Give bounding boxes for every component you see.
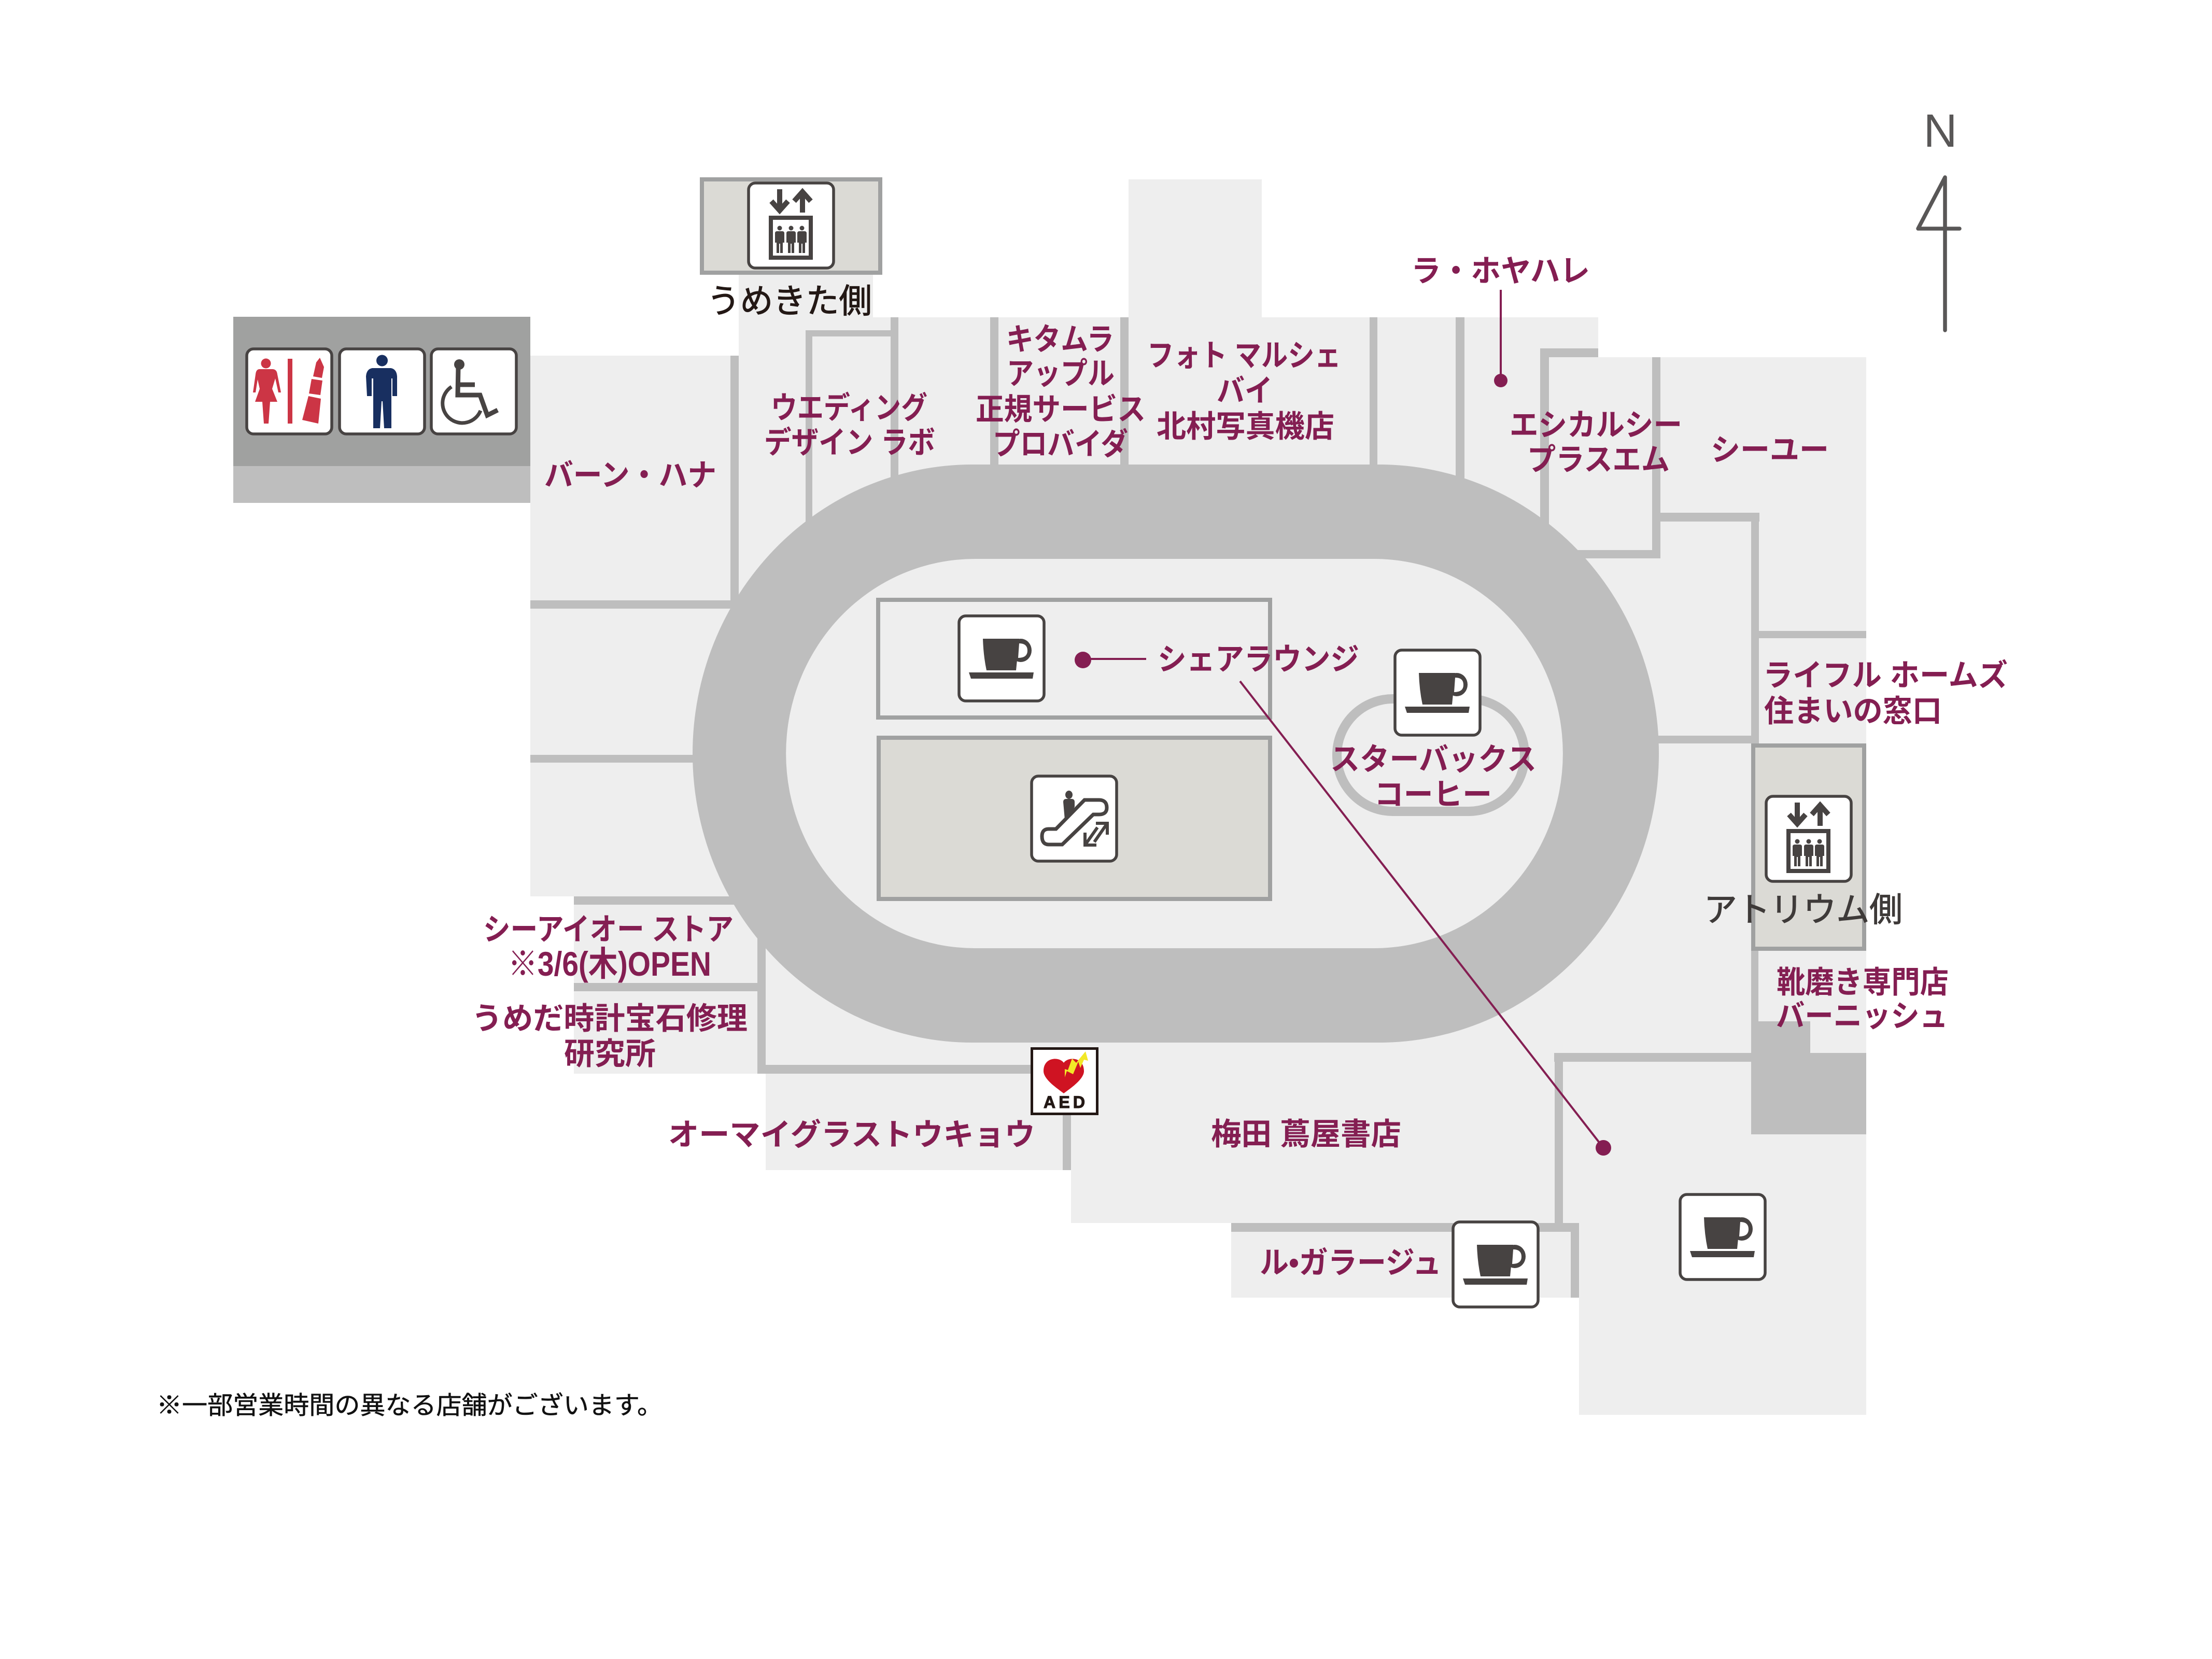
label: kitamura apple service provider: 正規サービス <box>976 392 1146 427</box>
label: kitamura apple service provider: プロバイダ <box>993 427 1128 461</box>
label: photo marche by kitamura: 北村写真機店 <box>1157 410 1334 444</box>
floor plan background <box>530 179 1866 1415</box>
label: c.i.o store: シーアイオー ストア <box>483 912 734 947</box>
icon: men's restroom <box>340 349 425 434</box>
label: kitamura apple service provider: キタムラ <box>1006 322 1114 357</box>
shop partition walls <box>530 317 1866 1298</box>
label: wedding design lab <box>764 391 935 460</box>
icon: women's restroom <box>247 349 332 434</box>
label: atrium side: アトリウム側 <box>1704 891 1903 929</box>
label: varnish shoe shine: 靴磨き専門店 <box>1777 965 1949 1000</box>
label: umeda watch and jewelry repair lab <box>472 1002 748 1071</box>
icon: AED: AED <box>1044 1093 1085 1112</box>
icon: AED <box>1032 1048 1097 1114</box>
label: varnish shoe shine <box>1776 965 1949 1033</box>
label: umeda tsutaya books: 梅田 蔦屋書店 <box>1211 1117 1401 1151</box>
restroom area <box>233 317 530 503</box>
leader: share lounge to south-east cafe <box>1240 681 1611 1156</box>
leader: share lounge to cafe icon <box>1075 652 1146 668</box>
icon: starbucks cafe <box>1395 650 1480 735</box>
icon: umekita elevator <box>749 183 834 268</box>
north arrow <box>1918 105 1960 330</box>
label: ethical c plus m <box>1510 408 1682 477</box>
label: umeda watch and jewelry repair lab: 研究所 <box>564 1037 656 1071</box>
footnote: ※一部営業時間の異なる店舗がございます。 <box>157 1392 663 1419</box>
label: photo marche by kitamura: フォト マルシェ <box>1147 339 1341 373</box>
label: ethical c plus m: プラスエム <box>1527 443 1670 477</box>
label: lifull homes: 住まいの窓口 <box>1764 694 1942 728</box>
label: umekita side: うめきた側 <box>707 282 872 320</box>
label: varnish shoe shine: バーニッシュ <box>1776 999 1948 1033</box>
label: kitamura apple service provider: アップル <box>1007 357 1115 391</box>
label: c-you: シーユー <box>1711 433 1829 467</box>
central atrium floor <box>786 559 1563 948</box>
icon: south-east cafe <box>1680 1194 1765 1280</box>
label: barn hana: バーン・ハナ <box>544 458 716 493</box>
label: starbucks coffee: コーヒー <box>1374 778 1492 812</box>
oval walkway track <box>693 465 1659 1043</box>
label: oh my glass tokyo: オーマイグラストウキョウ <box>668 1118 1035 1152</box>
label: photo marche by kitamura: バイ <box>1217 374 1273 408</box>
label: umeda watch and jewelry repair lab: うめだ時計宝石修理 <box>472 1002 748 1036</box>
panel: atrium elevator lobby <box>1753 746 1864 949</box>
label: c.i.o store: ※3/6(木)OPEN <box>508 945 711 983</box>
label: lifull homes: ライフル ホームズ <box>1763 658 2008 693</box>
icon: le garage cafe <box>1453 1222 1538 1307</box>
label: starbucks coffee <box>1330 742 1537 812</box>
panel: starbucks counter outline <box>1337 699 1525 811</box>
north arrow: N <box>1923 105 1957 157</box>
icon: share lounge cafe <box>959 616 1044 701</box>
label: la joya hare: ラ・ホヤハレ <box>1411 254 1590 288</box>
label: lifull homes <box>1763 658 2008 728</box>
icon: accessible restroom <box>431 349 516 434</box>
label: ethical c plus m: エシカルシー <box>1510 408 1682 442</box>
panel: share lounge <box>878 600 1270 718</box>
label: wedding design lab: デザイン ラボ <box>764 426 935 460</box>
icon: atrium elevator <box>1766 796 1851 881</box>
label: share lounge: シェアラウンジ <box>1158 642 1359 677</box>
label: starbucks coffee: スターバックス <box>1330 742 1537 777</box>
label: le garage: ル•ガラージュ <box>1260 1246 1442 1280</box>
panel: umekita elevator lobby <box>702 179 880 273</box>
leader: la joya hare <box>1494 290 1507 387</box>
label: photo marche by kitamura <box>1147 339 1341 444</box>
label: wedding design lab: ウエディング <box>771 391 927 425</box>
label: kitamura apple service provider <box>976 322 1146 461</box>
icon: escalator <box>1032 776 1117 861</box>
panel: escalator void <box>879 738 1270 899</box>
label: c.i.o store <box>483 912 734 983</box>
